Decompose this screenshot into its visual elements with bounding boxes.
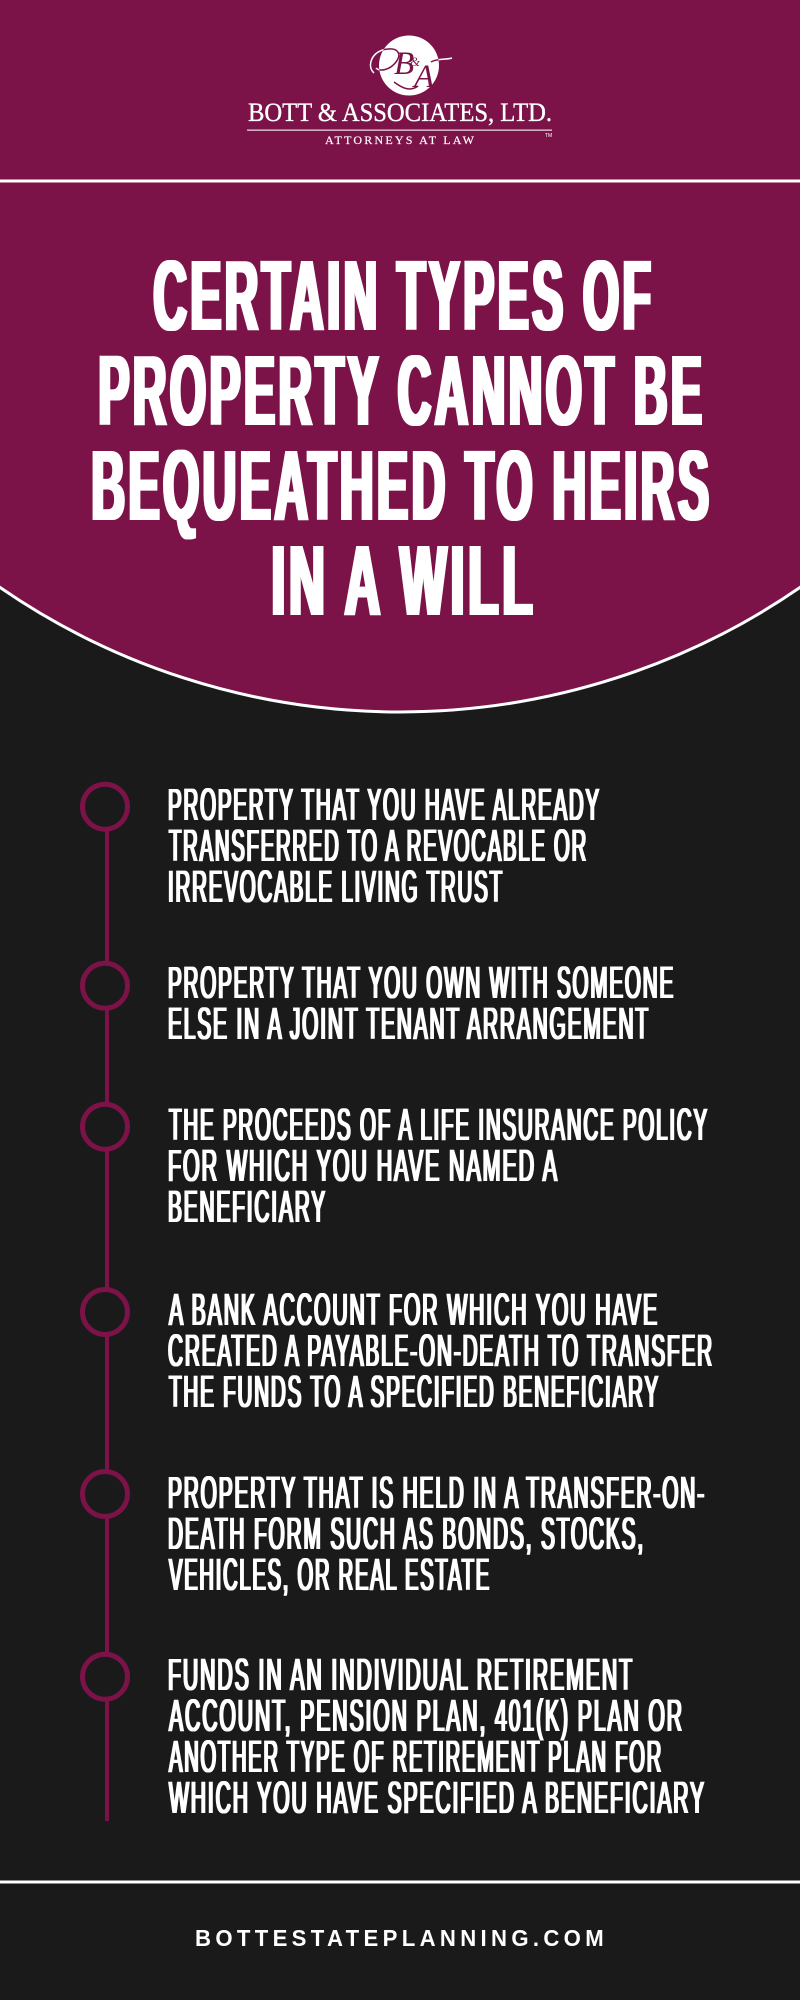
item 6 text <box>168 1649 706 1823</box>
trademark: TM <box>545 133 552 139</box>
marker 4 <box>82 1290 128 1334</box>
item 5 text <box>168 1467 706 1600</box>
item 3 text: BENEFICIARY <box>168 1181 327 1232</box>
title: IN A WILL <box>272 525 536 637</box>
footer divider <box>0 1880 800 1884</box>
logo tagline: ATTORNEYS AT LAW <box>325 133 475 147</box>
item 1 text <box>168 779 601 912</box>
icon: B&A monogram: B <box>394 46 414 82</box>
top divider <box>0 180 800 182</box>
logo wordmark: BOTT & ASSOCIATES, LTD. <box>248 98 552 127</box>
list text <box>168 779 714 1823</box>
item 2 text <box>168 957 675 1049</box>
icon: B&A monogram <box>370 36 452 96</box>
footer website: BOTTESTATEPLANNING.COM <box>195 1925 608 1951</box>
icon: B&A monogram: A <box>412 59 435 95</box>
marker 1 <box>82 784 128 829</box>
logo: Bott & Associates <box>247 36 552 147</box>
title <box>92 240 712 637</box>
marker 6 <box>82 1654 128 1699</box>
timeline: markers and connectors <box>82 784 128 1821</box>
icon: B&A monogram: & <box>410 54 421 69</box>
connector lines <box>105 831 109 1821</box>
item 4 text <box>168 1284 714 1417</box>
header panel: curved maroon banner <box>0 0 800 712</box>
marker 3 <box>82 1104 128 1149</box>
marker 5 <box>82 1472 128 1516</box>
item 3 text <box>168 1099 709 1232</box>
marker 2 <box>82 963 128 1008</box>
